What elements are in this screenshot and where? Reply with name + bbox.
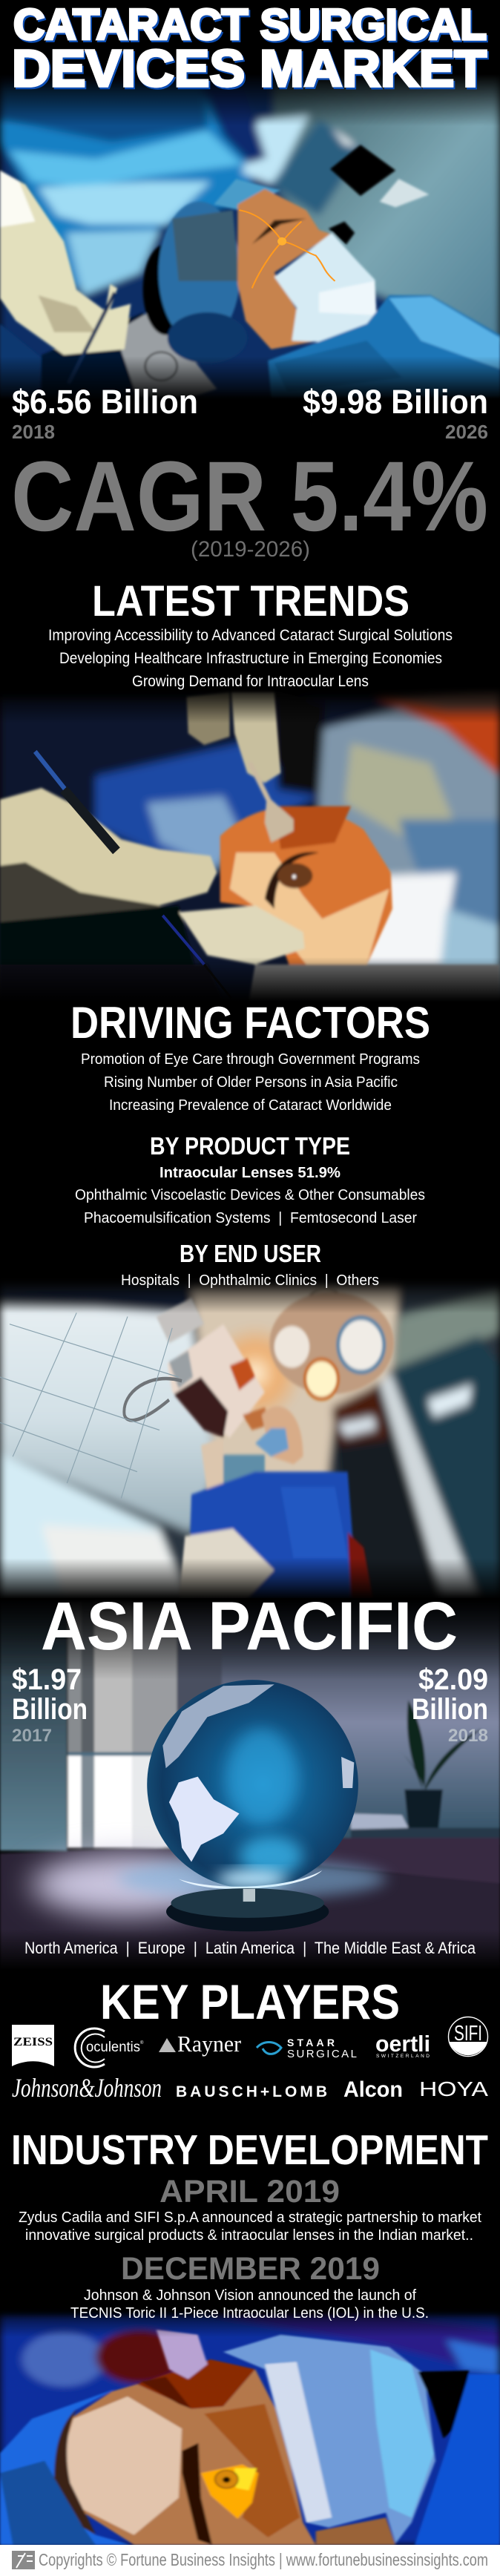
logo: Rayner: Rayner xyxy=(177,2031,242,2057)
stat: 2018 value: $2.09 xyxy=(418,1663,488,1696)
product type list: Phacoemulsification Systems | Femtosecond Laser xyxy=(84,1210,417,1226)
panel: asia pacific xyxy=(0,1588,500,1985)
news: December 2019: Johnson & Johnson Vision announced the launch of xyxy=(84,2287,416,2304)
photo: patient with illuminated eye xyxy=(0,2315,500,2545)
driving factors list xyxy=(81,1051,420,1114)
product type list xyxy=(75,1165,425,1226)
stat: 2018 market value xyxy=(12,383,198,443)
stat: 2026 market value: 2026 xyxy=(445,421,488,443)
globe stand xyxy=(166,1888,329,1931)
fade: bottom of photo xyxy=(0,957,500,1002)
stat: 2017 value: $1.97 xyxy=(12,1663,82,1696)
trend list: Improving Accessibility to Advanced Cataract Surgical Solutions xyxy=(48,627,453,644)
fade: bottom of hero xyxy=(0,356,500,401)
heading: latest trends: LATEST TRENDS xyxy=(92,577,409,625)
panel: industry development xyxy=(11,2126,488,2287)
globe xyxy=(147,1680,358,1889)
logo: Staar Surgical: SURGICAL xyxy=(287,2048,357,2060)
mask: below photo xyxy=(0,1600,500,1614)
photo: glowing globe on desk xyxy=(0,1600,500,1973)
fade: bottom of photo xyxy=(0,1558,500,1600)
logo: Oertli: SWITZERLAND xyxy=(376,2054,430,2059)
logo: Bausch and Lomb: BAUSCH+LOMB xyxy=(176,2083,327,2100)
title xyxy=(12,1,487,97)
fade: top of closing photo xyxy=(0,2300,500,2337)
stat: 2017 value xyxy=(12,1663,88,1746)
fade: top of room photo xyxy=(0,1598,500,1680)
fade: bottom of room photo xyxy=(0,1929,500,1970)
stat: 2018 value: 2018 xyxy=(448,1726,488,1746)
driving factors list: Increasing Prevalence of Cataract Worldwide xyxy=(109,1097,392,1114)
stat: CAGR: (2019-2026) xyxy=(191,537,310,562)
mask: above closing photo xyxy=(0,2289,500,2300)
stat: 2018 market value: $6.56 Billion xyxy=(12,383,198,421)
trend list: Growing Demand for Intraocular Lens xyxy=(132,673,369,690)
trend list xyxy=(48,627,453,690)
logo: Oculentis: ® xyxy=(140,2040,144,2046)
news: December 2019: TECNIS Toric II 1-Piece Intraocular Lens (IOL) in the U.S. xyxy=(70,2305,429,2322)
news: April 2019: Zydus Cadila and SIFI S.p.A announced a strategic partnership to market xyxy=(19,2209,481,2226)
mask: above photo xyxy=(0,668,500,686)
fade: title gradient xyxy=(0,74,500,126)
panel: key players xyxy=(12,1974,488,2103)
stat: 2017 value: Billion xyxy=(12,1693,88,1726)
stat: 2018 value xyxy=(412,1663,488,1746)
title: DEVICES MARKET xyxy=(12,39,487,97)
stat: 2026 market value xyxy=(303,383,488,443)
photo: patient under laser eye surgery xyxy=(0,71,500,398)
logo: Alcon: Alcon xyxy=(343,2077,403,2102)
product type list: Ophthalmic Viscoelastic Devices & Other Consumables xyxy=(75,1187,425,1203)
logo: Johnson and Johnson: Johnson&Johnson xyxy=(12,2073,162,2103)
logo: Zeiss: ZEISS xyxy=(13,2036,53,2048)
photo: surgical hands at eye xyxy=(0,687,500,1005)
heading: by product type: BY PRODUCT TYPE xyxy=(150,1132,350,1160)
date: April 2019: APRIL 2019 xyxy=(159,2174,340,2209)
logo: Hoya: HOYA xyxy=(419,2077,488,2100)
title: CATARACT SURGICAL xyxy=(13,1,487,49)
mask: below hero xyxy=(0,401,500,423)
driving factors list: Promotion of Eye Care through Government Programs xyxy=(81,1051,420,1068)
news: April 2019: innovative surgical products & intraocular lenses in the Indian market.. xyxy=(25,2227,473,2244)
panel: hero xyxy=(0,0,500,443)
logo: Oertli: oertli xyxy=(375,2031,430,2057)
logo: Oculentis: oculentis xyxy=(86,2040,140,2055)
fade: top of photo xyxy=(0,686,500,723)
logo: SIFI xyxy=(448,2017,488,2057)
stat: 2026 market value: $9.98 Billion xyxy=(303,383,488,421)
mask: above photo xyxy=(0,1254,500,1276)
stat: 2018 market value: 2018 xyxy=(12,421,55,443)
logo: Oculentis xyxy=(75,2028,144,2067)
logo: Staar Surgical: STAAR xyxy=(287,2037,335,2048)
logo: Zeiss xyxy=(12,2025,54,2066)
product type list: Intraocular Lenses 51.9% xyxy=(159,1165,341,1181)
photo: surgeon with operating microscope xyxy=(0,1254,500,1614)
panel: driving factors xyxy=(70,998,430,1289)
date: December 2019: DECEMBER 2019 xyxy=(121,2251,380,2287)
panel: latest trends xyxy=(0,577,500,1016)
fade: top of photo xyxy=(0,1276,500,1313)
heading: asia pacific: ASIA PACIFIC xyxy=(41,1588,458,1664)
news: December 2019 xyxy=(70,2287,429,2322)
stat: 2017 value: 2017 xyxy=(12,1726,52,1746)
heading: by end user: BY END USER xyxy=(180,1240,321,1267)
fade: top of hero xyxy=(0,0,500,74)
heading: key players: KEY PLAYERS xyxy=(100,1974,400,2029)
logo: SIFI: SIFI xyxy=(454,2022,482,2046)
heading: driving factors: DRIVING FACTORS xyxy=(70,998,430,1048)
driving factors list: Rising Number of Older Persons in Asia Pacific xyxy=(104,1074,398,1091)
icon: Fortune Business Insights logo xyxy=(12,2551,35,2569)
panel: closing photo xyxy=(0,2287,500,2545)
stat: 2018 value: Billion xyxy=(412,1693,488,1726)
end user list: Hospitals | Ophthalmic Clinics | Others xyxy=(121,1272,379,1289)
mask: below photo xyxy=(0,1002,500,1016)
logo: Staar Surgical xyxy=(257,2037,357,2060)
mask: below room photo xyxy=(0,1970,500,1985)
trend list: Developing Healthcare Infrastructure in Emerging Economies xyxy=(59,650,442,667)
news: April 2019 xyxy=(19,2209,481,2244)
footer xyxy=(0,2545,500,2576)
